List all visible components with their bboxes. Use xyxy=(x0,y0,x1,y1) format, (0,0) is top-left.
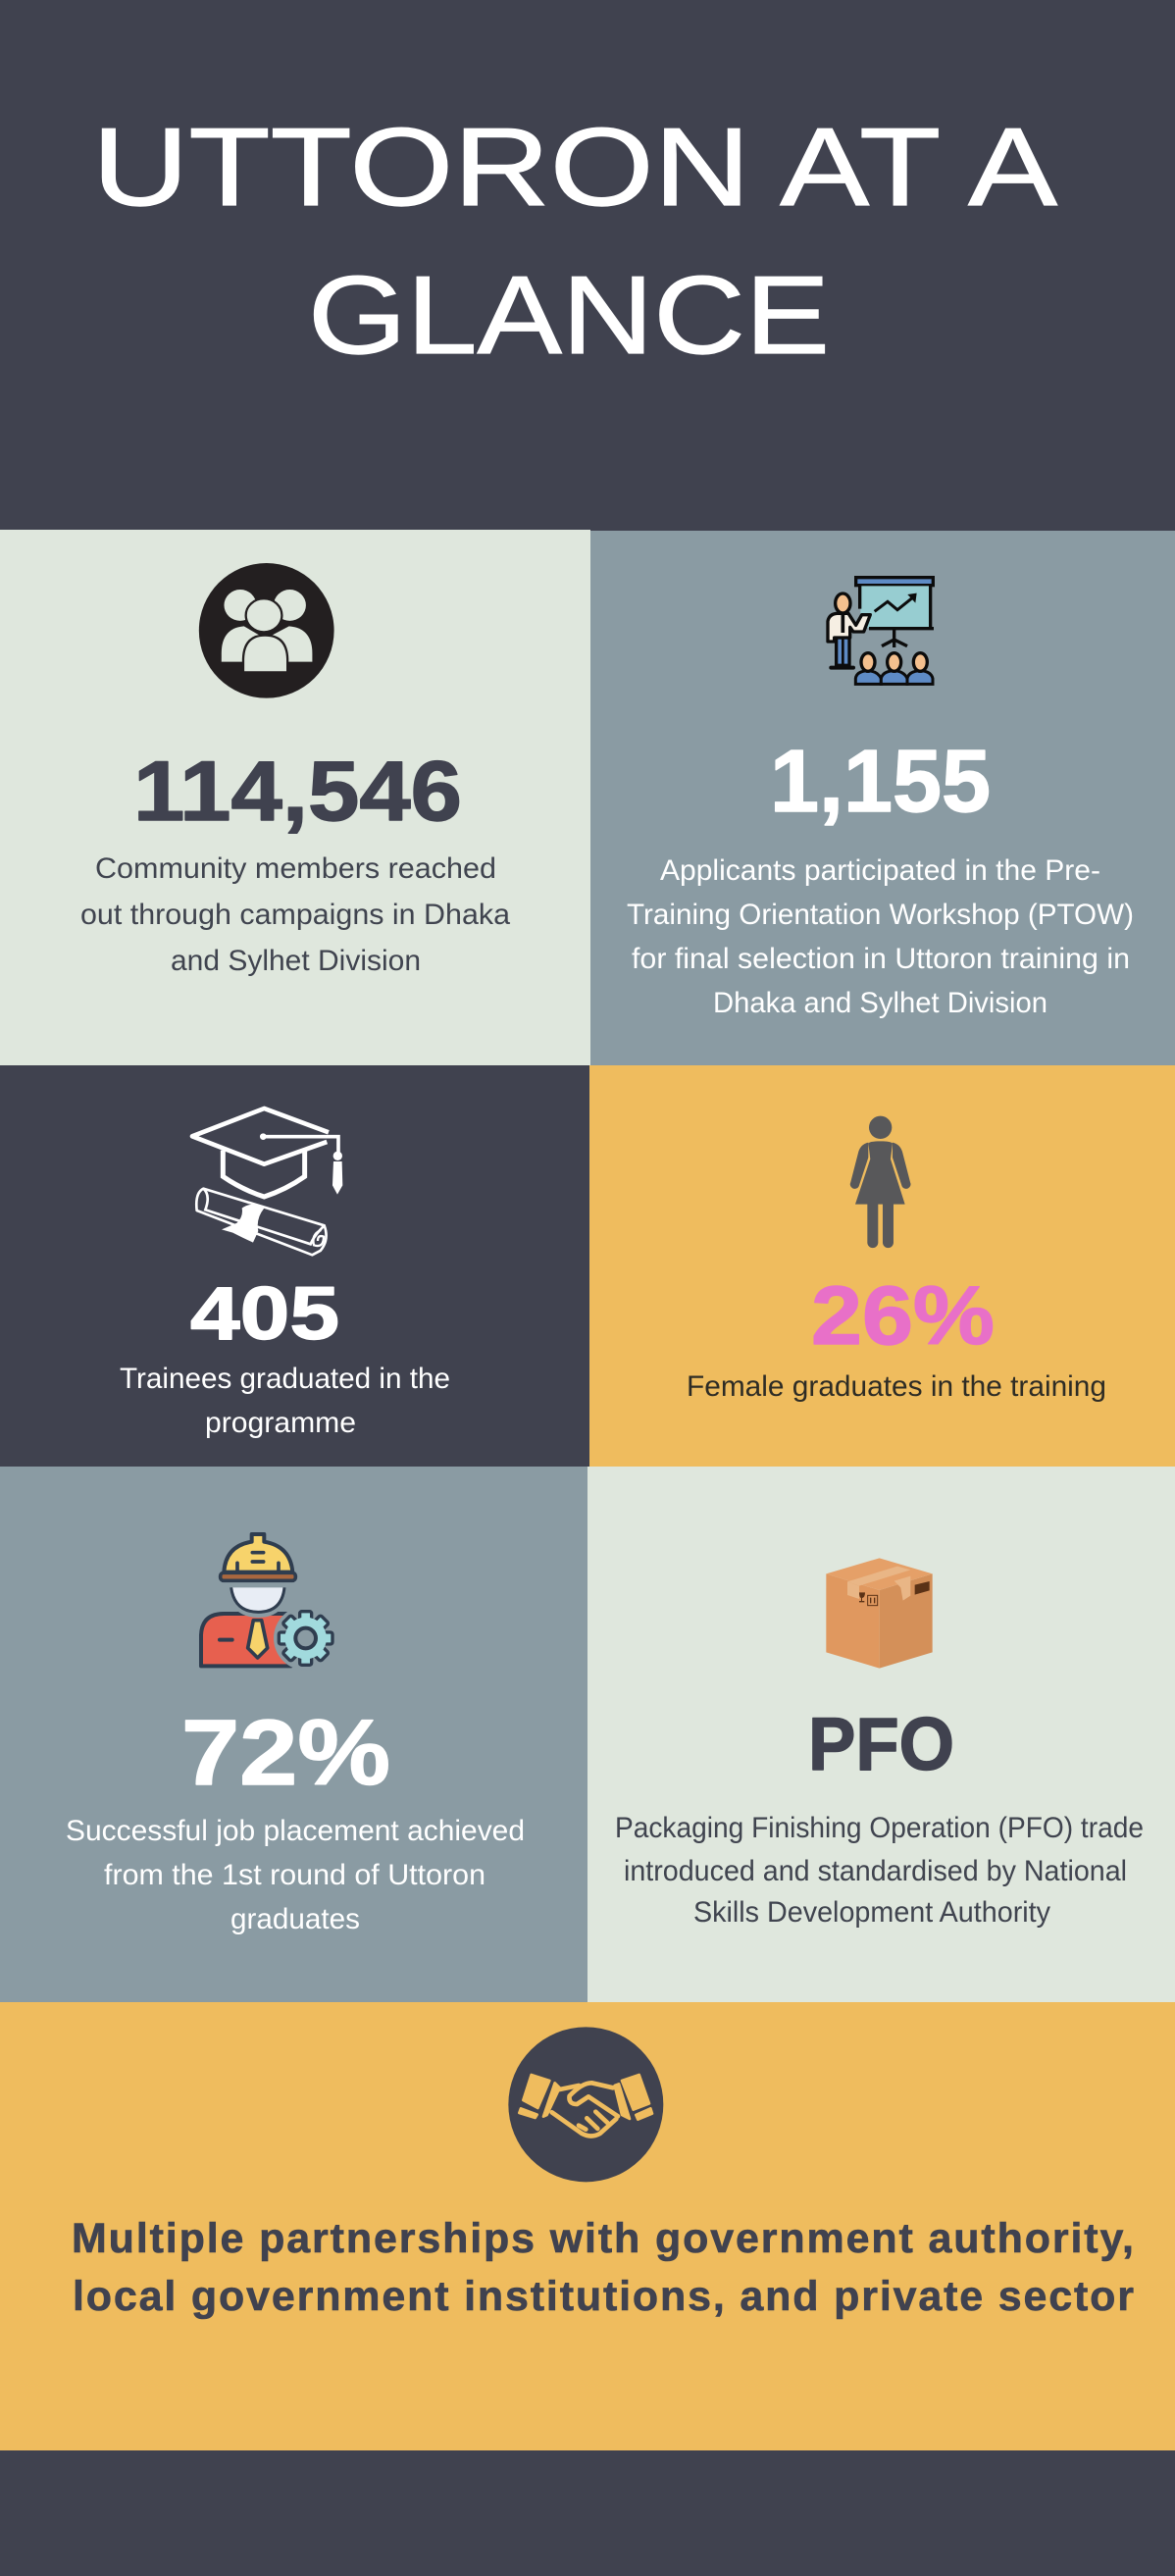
number: 72%: 72% xyxy=(181,1701,390,1805)
description: Successful job placement achieved xyxy=(66,1815,525,1847)
footer band xyxy=(0,2450,1175,2576)
heading: PFO: PFO xyxy=(808,1703,954,1786)
number: 114,546: 114,546 xyxy=(133,745,462,839)
partnerships statement: Multiple partnerships with government authority, xyxy=(72,2215,1134,2262)
icon: group of people xyxy=(199,563,334,698)
icon: presenter with audience xyxy=(828,578,934,684)
description: Community members reached xyxy=(95,852,496,885)
title: GLANCE xyxy=(308,253,830,377)
description: programme xyxy=(205,1407,356,1439)
description xyxy=(120,1363,450,1439)
description: and Sylhet Division xyxy=(171,945,421,977)
icon: handshake xyxy=(508,2027,663,2182)
description: for final selection in Uttoron training in xyxy=(632,943,1130,975)
panel: packaging finishing operation xyxy=(588,1467,1175,2002)
number: 1,155: 1,155 xyxy=(770,733,991,831)
number: 405: 405 xyxy=(190,1272,339,1356)
description: Applicants participated in the Pre- xyxy=(660,854,1100,887)
title xyxy=(92,105,1058,377)
description: out through campaigns in Dhaka xyxy=(80,899,511,931)
icon: cardboard box xyxy=(826,1558,933,1669)
header panel xyxy=(0,0,1175,531)
number: 26%: 26% xyxy=(811,1269,995,1362)
panel: female graduates xyxy=(589,1065,1175,1467)
description xyxy=(615,1812,1144,1929)
panel: job placement xyxy=(0,1467,588,2002)
description xyxy=(627,854,1134,1019)
description: Packaging Finishing Operation (PFO) trade xyxy=(615,1812,1144,1844)
description: Dhaka and Sylhet Division xyxy=(713,987,1047,1019)
icon: worker with gear xyxy=(201,1534,337,1671)
panel: community members reached xyxy=(0,530,590,1065)
description xyxy=(66,1815,525,1935)
description: from the 1st round of Uttoron xyxy=(104,1859,485,1891)
title: UTTORON AT A xyxy=(92,105,1058,229)
panel: workshop applicants xyxy=(590,531,1175,1065)
description: Training Orientation Workshop (PTOW) xyxy=(627,899,1134,931)
description: Female graduates in the training xyxy=(687,1370,1106,1403)
partnerships statement xyxy=(72,2215,1134,2320)
description: graduates xyxy=(230,1903,360,1935)
description: Skills Development Authority xyxy=(693,1896,1050,1929)
icon: woman xyxy=(850,1116,911,1248)
panel: partnerships xyxy=(0,2002,1175,2450)
partnerships statement: local government institutions, and private sector xyxy=(73,2273,1134,2320)
panel: trainees graduated xyxy=(0,1065,589,1467)
description xyxy=(80,852,511,977)
description: Trainees graduated in the xyxy=(120,1363,450,1395)
icon: graduation cap and diploma xyxy=(192,1108,342,1255)
description: introduced and standardised by National xyxy=(624,1855,1127,1887)
